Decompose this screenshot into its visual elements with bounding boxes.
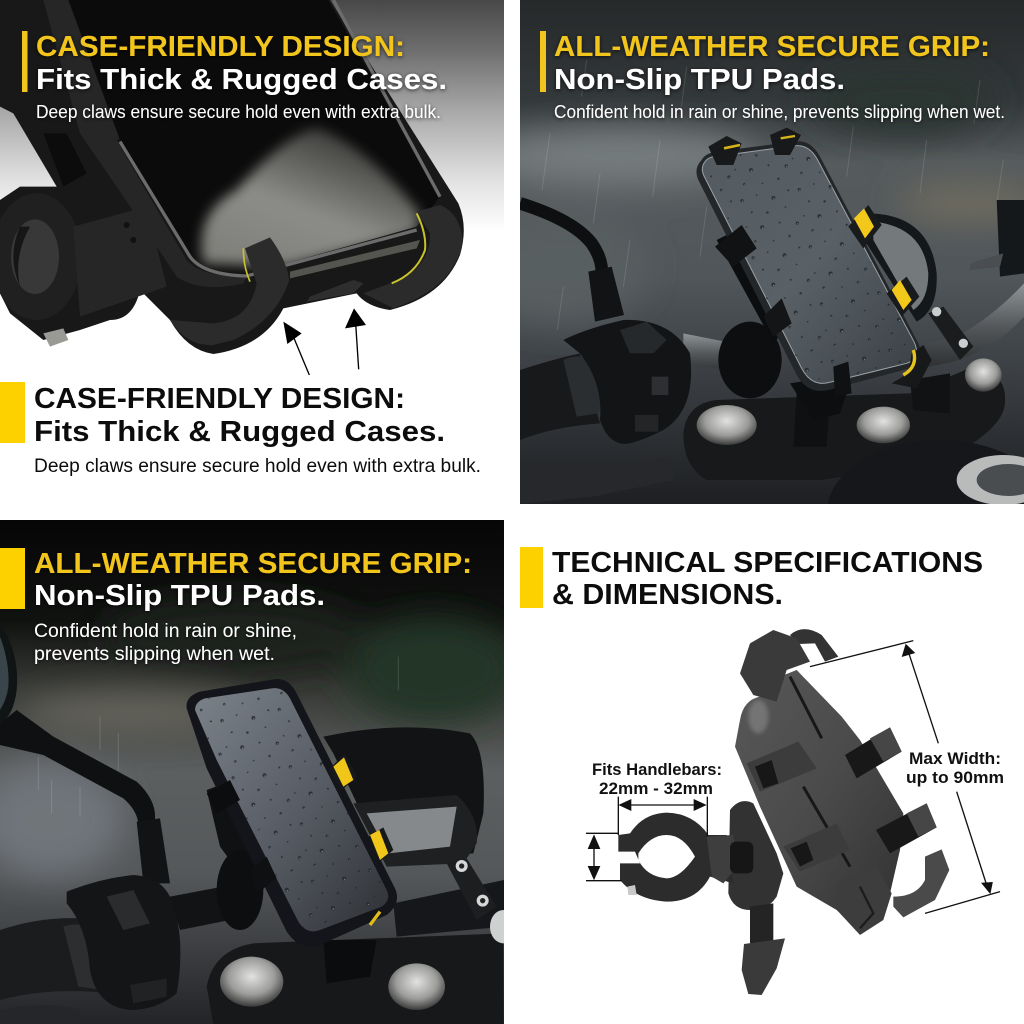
panel: case-friendly design [0, 0, 504, 504]
icon: silver clamp screw [43, 328, 68, 347]
photo: mirror and stem [0, 623, 170, 883]
mount: lower fixing [742, 938, 785, 995]
accent bar [0, 548, 25, 609]
label: fits handlebars: Fits Handlebars: [592, 761, 722, 779]
heading: technical specifications [552, 547, 983, 611]
photo: right handlebar [393, 858, 504, 937]
side arms [207, 780, 277, 893]
blurred road background [0, 520, 520, 1024]
lower heading: case-friendly: Fits Thick & Rugged Cases. [34, 416, 445, 448]
label: max width [906, 749, 1004, 787]
heading: all-weather grip: ALL-WEATHER SECURE GRIP: [34, 548, 472, 580]
heading: technical specifications: & DIMENSIONS. [552, 579, 783, 611]
water droplets on phone [195, 688, 388, 931]
photo: triple clamp and bolts [207, 910, 517, 1024]
mount: ball arm [728, 801, 783, 943]
mount: body plate [735, 670, 903, 933]
heading: all-weather grip [554, 31, 990, 96]
overlay heading: case-friendly [36, 31, 447, 96]
left claw with yellow pad [170, 237, 289, 345]
subtext: all-weather grip: Confident hold in rain or shine, [34, 621, 297, 642]
arrow: toward right claw [345, 308, 366, 369]
mount: highlight on plate [748, 700, 768, 733]
lower heading: case-friendly [34, 383, 445, 448]
heading: all-weather grip: ALL-WEATHER SECURE GRIP: [554, 31, 990, 63]
subtext: all-weather grip: prevents slipping when wet. [34, 644, 275, 665]
subtext: all-weather grip: Confident hold in rain or shine, prevents slipping when wet. [554, 102, 1005, 122]
mount: top claws [740, 630, 810, 702]
accent bar: lower [0, 382, 25, 443]
mount: rear arms [206, 786, 265, 930]
heading: all-weather grip: Non-Slip TPU Pads. [34, 580, 325, 612]
panel 1 background gradient [0, 0, 504, 218]
photo: instrument cluster [323, 727, 484, 867]
dimension: clamp diameter [586, 797, 707, 881]
panel: technical specifications [520, 547, 1004, 995]
right claw with yellow pad [363, 205, 463, 308]
accent bar [520, 547, 543, 608]
side arms [715, 205, 919, 337]
mount: handlebar clamp [618, 813, 753, 902]
mount: clamp and rear arm [717, 230, 853, 420]
overlay heading: case-friendly: Fits Thick & Rugged Cases. [36, 64, 447, 96]
panel: all-weather grip, bottom left [0, 520, 520, 1024]
panel: all-weather grip, top right [520, 0, 1024, 504]
lower heading: case-friendly: CASE-FRIENDLY DESIGN: [34, 383, 405, 415]
heading: technical specifications: TECHNICAL SPECIFICATIONS [552, 547, 983, 579]
phone: wet screen [696, 141, 921, 391]
photo: fuel tank and cap [828, 443, 1024, 504]
water droplets on phone [702, 146, 917, 383]
yellow side pads [328, 753, 393, 925]
heading: all-weather grip: Non-Slip TPU Pads. [554, 64, 845, 96]
photo: switch housing and grip [520, 320, 691, 504]
top claws with yellow pads [708, 128, 801, 165]
label: fits handlebars: 22mm - 32mm [599, 780, 713, 798]
label: fits handlebars [592, 761, 722, 798]
arrow: toward left claw [283, 322, 309, 375]
heading: all-weather grip [34, 548, 472, 612]
bottom claws [833, 345, 932, 397]
phone in rugged case [186, 679, 397, 947]
overlay heading: case-friendly: CASE-FRIENDLY DESIGN: [36, 31, 405, 63]
label: max width: Max Width: [909, 749, 1001, 768]
photo: mirror stem [520, 203, 624, 322]
photo: switch housing and grip [0, 875, 226, 1010]
dimension: max width [810, 641, 1000, 913]
lower subtext: case-friendly: Deep claws ensure secure hold even with extra bulk. [34, 456, 481, 477]
mount: bottom claws [835, 849, 949, 935]
label: max width: up to 90mm [906, 768, 1004, 787]
mount: rear claw [790, 629, 838, 662]
accent bar: top [22, 31, 28, 92]
accent bar [540, 31, 546, 92]
subtext: all-weather grip [34, 621, 297, 665]
photo: mount holding a rugged phone close up [0, 0, 464, 354]
mount: right arms [845, 727, 937, 853]
photo: right handlebar [928, 200, 1024, 367]
photo: chrome handlebar [683, 334, 722, 368]
mount: cross arms [747, 742, 850, 872]
rainy background [473, 0, 1024, 504]
photo: triple clamp and bolts [683, 358, 1005, 480]
photo: speedometer [860, 213, 937, 322]
product drawing: phone mount with dimensions [586, 629, 1000, 995]
overlay subtext: case-friendly: Deep claws ensure secure hold even with extra bulk. [36, 102, 441, 122]
